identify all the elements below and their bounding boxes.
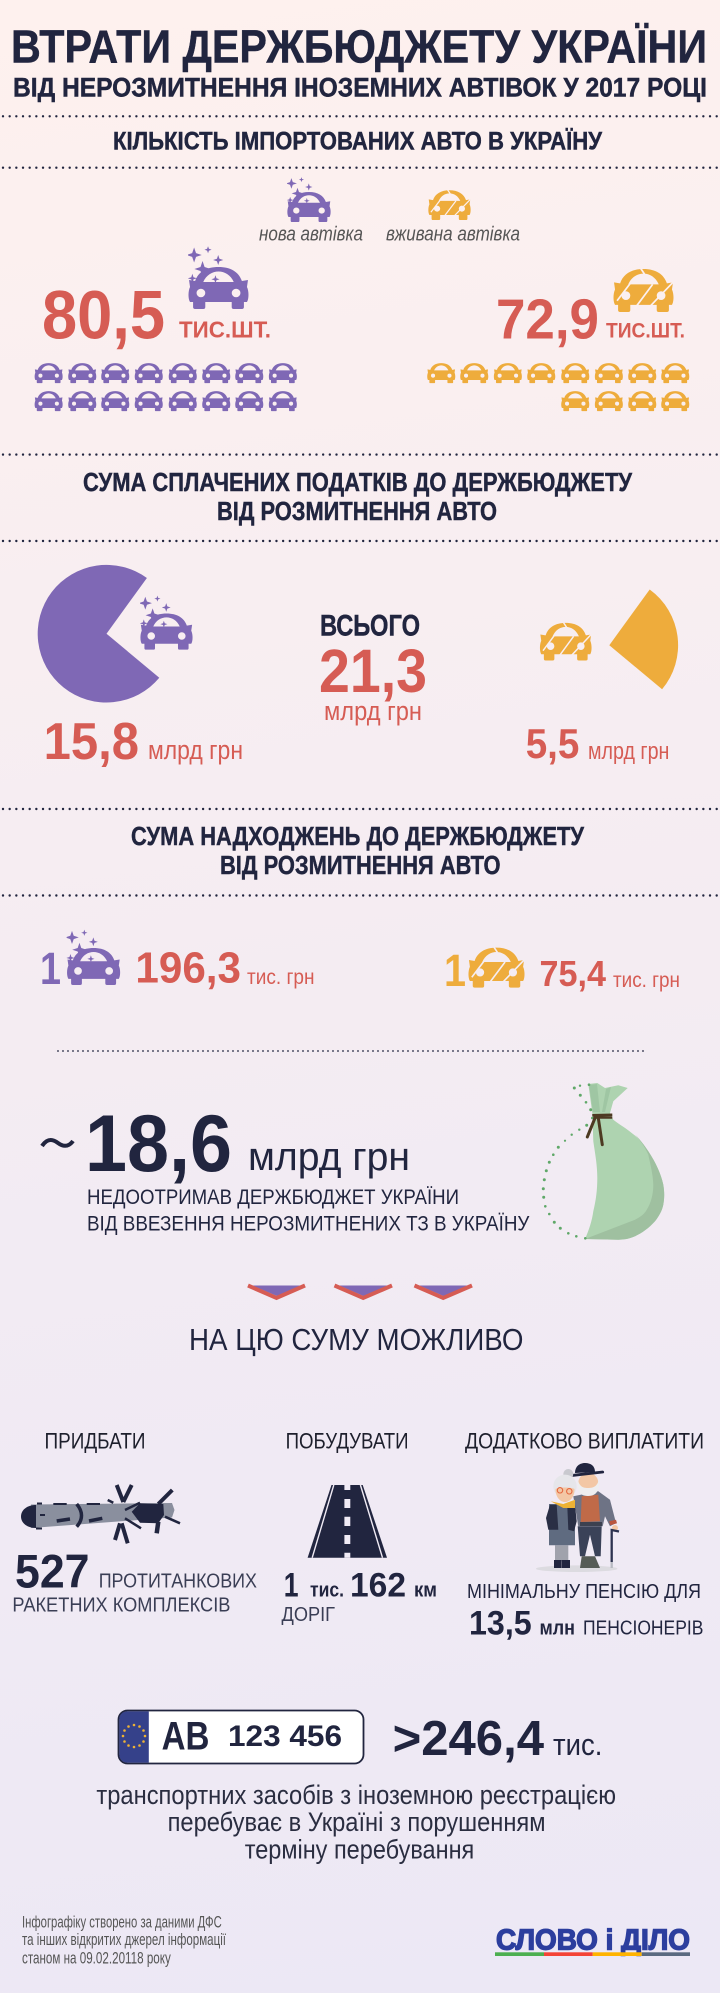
number: road length: 1 [284, 1567, 298, 1605]
source note: станом на 09.02.20118 року [22, 1949, 171, 1967]
logo: СЛОВО і ДІЛО [496, 1924, 690, 1956]
heading: budget revenue: СУМА НАДХОДЖЕНЬ ДО ДЕРЖБЮДЖЕТУ [131, 821, 585, 851]
panel: roads: ПОБУДУВАТИ [286, 1428, 409, 1453]
number: new cars: 80,5 [42, 276, 165, 353]
panel: missiles [12, 1428, 257, 1617]
number: pensioners: ПЕНСІОНЕРІВ [583, 1617, 703, 1639]
panel: lost revenue [42, 1099, 530, 1236]
unit: new cars: ТИС.ШТ. [179, 316, 271, 342]
panel: revenue per used car [444, 945, 680, 996]
description: pensions: МІНІМАЛЬНУ ПЕНСІЮ ДЛЯ [467, 1581, 701, 1603]
heading: taxes paid: СУМА СПЛАЧЕНИХ ПОДАТКІВ ДО ДЕРЖБЮДЖЕТУ [83, 467, 633, 497]
source note [22, 1913, 226, 1967]
heading: budget revenue [131, 821, 585, 880]
panel: pensions [465, 1428, 704, 1642]
number: road length [284, 1567, 437, 1605]
number: pensioners: млн [540, 1617, 575, 1639]
number: road length: тис. [310, 1580, 344, 1602]
icon: anti-tank missile [21, 1485, 180, 1543]
icon: used car [468, 947, 525, 988]
number: missiles: 527 [15, 1545, 90, 1598]
icon: used car [540, 622, 592, 660]
description [96, 1780, 616, 1864]
icon: licence plate [118, 1710, 364, 1764]
heading: budget revenue: ВІД РОЗМИТНЕННЯ АВТО [220, 850, 500, 880]
panel: total taxes: млрд грн [324, 696, 422, 726]
legend label: used car: вживана автівка [386, 224, 520, 246]
icon: road [308, 1485, 387, 1558]
heading: imported cars: КІЛЬКІСТЬ ІМПОРТОВАНИХ АВТО В УКРАЇНУ [113, 128, 603, 155]
unit: млрд грн [588, 738, 669, 765]
heading: taxes paid: ВІД РОЗМИТНЕННЯ АВТО [217, 496, 497, 526]
panel: revenue per used car: 1 [444, 945, 466, 996]
panel: used cars count [427, 268, 689, 411]
number: used cars tax: 5,5 [526, 720, 579, 767]
panel: new cars count [35, 246, 297, 411]
number: vehicles: >246,4 [393, 1712, 544, 1766]
panel: missiles: ПРИДБАТИ [44, 1428, 146, 1453]
description: missiles [12, 1571, 257, 1617]
number: road length: км [414, 1580, 437, 1602]
arrows: three chevrons [248, 1286, 472, 1298]
number: revenue per used car: 75,4 [540, 953, 606, 994]
description: roads: ДОРІГ [282, 1604, 335, 1626]
heading: taxes paid [83, 467, 633, 526]
panel: taxes used cars [526, 590, 678, 767]
panel: revenue per new car [40, 930, 314, 994]
tilde [42, 1140, 73, 1146]
icon: licence plate: AB [162, 1714, 209, 1758]
pie: new cars share [38, 565, 159, 702]
legend label: new car: нова автівка [259, 224, 363, 246]
unit: used cars: ТИС.ШТ. [606, 319, 685, 342]
panel: roads [282, 1428, 437, 1626]
panel: taxes new cars [38, 565, 243, 771]
pictogram: used cars [427, 363, 689, 411]
icon: new car [65, 930, 120, 985]
description: missiles: ПРОТИТАНКОВИХ [99, 1571, 257, 1593]
description: транспортних засобів з іноземною реєстрацією [96, 1780, 616, 1810]
description: перебуває в Україні з порушенням [168, 1807, 546, 1837]
icon: used car [614, 268, 673, 312]
icon: new car legend [286, 177, 331, 222]
number: lost revenue: 18,6 [85, 1099, 232, 1189]
icon: licence plate: 123 456 [228, 1720, 342, 1753]
icon: new car [139, 596, 193, 650]
source note: Інфографіку створено за даними ДФС [22, 1913, 222, 1931]
panel: total taxes: 21,3 [319, 637, 427, 705]
number: used cars: 72,9 [496, 287, 599, 351]
unit: млрд грн [248, 1135, 410, 1179]
heading: what this sum can buy: НА ЦЮ СУМУ МОЖЛИВО [189, 1322, 523, 1357]
description: НЕДООТРИМАВ ДЕРЖБЮДЖЕТ УКРАЇНИ [87, 1185, 459, 1209]
pictogram: new cars [35, 363, 297, 411]
icon: new car [186, 246, 248, 309]
description: ВІД ВВЕЗЕННЯ НЕРОЗМИТНЕНИХ ТЗ В УКРАЇНУ [87, 1212, 530, 1236]
description: missiles: РАКЕТНИХ КОМПЛЕКСІВ [12, 1595, 230, 1617]
unit: млрд грн [148, 735, 243, 765]
unit: тис. [553, 1727, 602, 1762]
number: road length: 162 [350, 1567, 406, 1605]
number: pensioners: 13,5 [469, 1604, 532, 1642]
description: терміну перебування [245, 1834, 474, 1864]
description [87, 1185, 530, 1236]
legend [259, 177, 520, 246]
icon: used car legend [428, 190, 471, 220]
pie: used cars share [609, 590, 678, 689]
unit: тис. грн [247, 966, 314, 989]
panel: total taxes [319, 610, 427, 726]
icon: elderly couple [536, 1463, 619, 1572]
source note: та інших відкритих джерел інформації [22, 1931, 226, 1949]
panel: revenue per new car: 1 [40, 943, 61, 994]
panel: foreign plates [96, 1710, 616, 1864]
icon: money bag [542, 1083, 664, 1240]
unit: тис. грн [613, 969, 680, 992]
number: revenue per new car: 196,3 [135, 944, 241, 993]
panel: total taxes: ВСЬОГО [320, 610, 420, 643]
title [11, 20, 707, 103]
number: pensioners [469, 1604, 703, 1642]
number: new cars tax: 15,8 [44, 713, 139, 771]
